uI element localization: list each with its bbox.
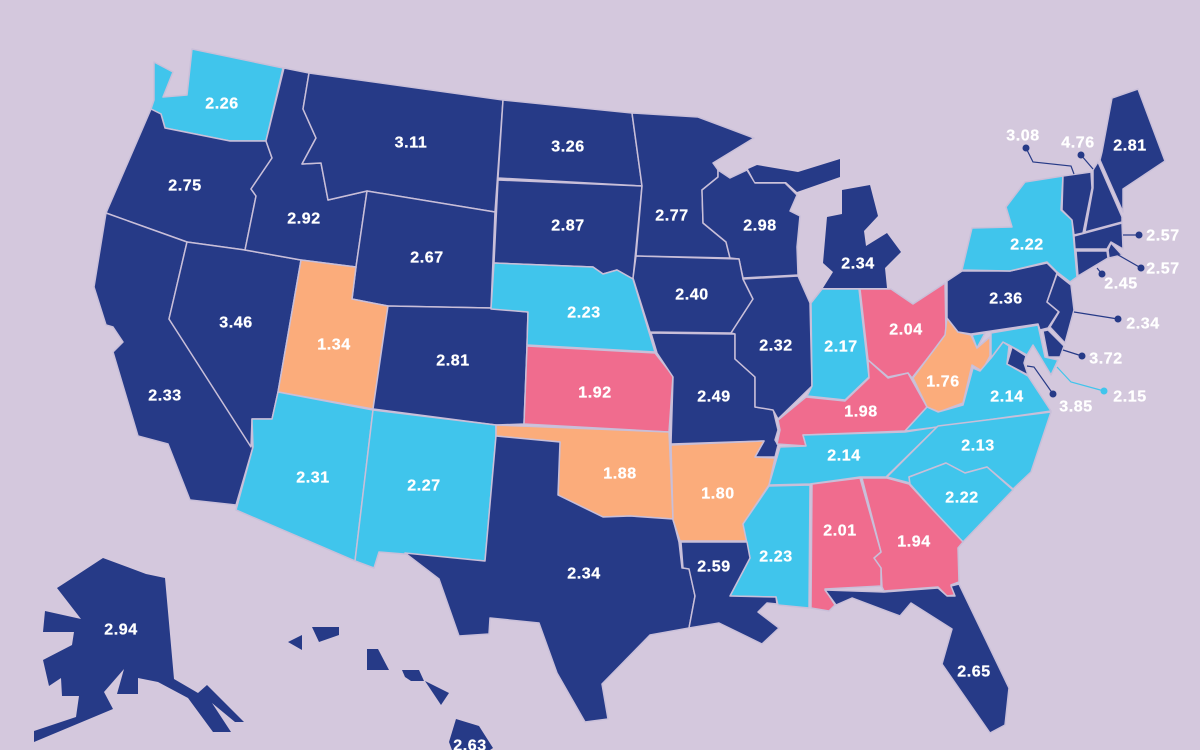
callout: Rhode Island: 2.57 bbox=[1146, 260, 1180, 278]
state: Montana: 3.11 bbox=[395, 134, 427, 152]
state: Indiana: 2.17 bbox=[824, 338, 858, 356]
state: Iowa: 2.40 bbox=[675, 286, 709, 304]
state: Nebraska bbox=[491, 263, 655, 352]
state: Oklahoma bbox=[496, 425, 673, 519]
callout: Maryland bbox=[1057, 367, 1147, 406]
state: Georgia: 1.94 bbox=[897, 534, 931, 550]
state: Wisconsin: 2.98 bbox=[743, 218, 777, 234]
state: Arkansas: 1.80 bbox=[701, 486, 735, 502]
state: Washington DC bbox=[1007, 347, 1028, 375]
state: Colorado bbox=[373, 306, 528, 425]
state: Arizona: 2.31 bbox=[296, 470, 330, 486]
callout: Washington DC bbox=[1027, 366, 1093, 416]
state: Idaho: 2.92 bbox=[287, 210, 321, 228]
state: Nebraska: 2.23 bbox=[567, 304, 601, 322]
callout: Vermont bbox=[1006, 128, 1074, 174]
state: Massachusetts bbox=[1074, 223, 1123, 249]
state: Vermont bbox=[1062, 172, 1092, 235]
callout: Delaware: 3.72 bbox=[1089, 350, 1123, 368]
state: California: 2.33 bbox=[148, 388, 182, 404]
state: Colorado: 2.81 bbox=[436, 352, 470, 370]
state: Wyoming: 2.67 bbox=[410, 250, 444, 266]
callout: Massachusetts: 2.57 bbox=[1146, 228, 1180, 244]
state: Minnesota: 2.77 bbox=[655, 208, 689, 224]
state: Louisiana bbox=[681, 542, 779, 644]
state: Nevada bbox=[169, 242, 301, 447]
state: New Hampshire bbox=[1085, 162, 1122, 232]
state: Washington bbox=[151, 49, 283, 141]
state: Oklahoma: 1.88 bbox=[603, 466, 637, 482]
state: Delaware bbox=[1043, 330, 1064, 357]
state: Georgia bbox=[862, 478, 963, 596]
state: New Jersey bbox=[1047, 274, 1074, 343]
state: Arkansas bbox=[671, 441, 775, 541]
state: Iowa bbox=[633, 256, 753, 333]
state: Idaho bbox=[245, 68, 367, 267]
state: Texas bbox=[405, 436, 695, 722]
callout: Maryland: 2.15 bbox=[1113, 388, 1147, 406]
state: Kentucky: 1.98 bbox=[844, 404, 878, 420]
state: Ohio bbox=[860, 283, 946, 378]
state: New Mexico: 2.27 bbox=[407, 478, 441, 494]
state: Washington: 2.26 bbox=[205, 96, 239, 112]
state: Nevada: 3.46 bbox=[219, 314, 253, 332]
state: Indiana bbox=[807, 289, 869, 400]
state: Arizona bbox=[236, 392, 373, 561]
callout: Delaware bbox=[1063, 350, 1123, 368]
state: Minnesota bbox=[632, 113, 754, 258]
state: North Dakota bbox=[498, 100, 642, 186]
callout: Connecticut: 2.45 bbox=[1104, 276, 1138, 292]
callout: Connecticut bbox=[1097, 268, 1138, 292]
state: Kentucky bbox=[777, 360, 927, 446]
state: Tennessee: 2.14 bbox=[827, 448, 861, 464]
state: Mississippi bbox=[730, 485, 810, 608]
callout: New Hampshire: 4.76 bbox=[1061, 134, 1095, 152]
state: Maryland panhandle bbox=[972, 333, 985, 348]
state: Florida bbox=[825, 584, 1009, 733]
state: Montana bbox=[302, 73, 503, 212]
state: Tennessee bbox=[769, 427, 937, 485]
state: Michigan: 2.34 bbox=[841, 256, 875, 272]
state: Texas: 2.34 bbox=[567, 566, 601, 582]
callout: Vermont: 3.08 bbox=[1006, 128, 1040, 144]
state: North Dakota: 3.26 bbox=[551, 138, 585, 156]
state: Alabama: 2.01 bbox=[823, 522, 857, 540]
state: California bbox=[94, 213, 253, 505]
state: Oregon bbox=[106, 109, 272, 250]
state: New York bbox=[962, 176, 1077, 282]
state: Connecticut bbox=[1076, 251, 1108, 276]
state: Florida: 2.65 bbox=[957, 664, 991, 680]
state: North Carolina: 2.13 bbox=[961, 438, 995, 454]
state: North Carolina bbox=[887, 412, 1051, 489]
callout: New Jersey: 2.34 bbox=[1126, 316, 1160, 332]
state: South Carolina: 2.22 bbox=[945, 490, 979, 506]
state: Missouri bbox=[651, 333, 778, 457]
state: Kansas bbox=[524, 346, 673, 432]
state: Alabama bbox=[811, 478, 881, 611]
state: Pennsylvania: 2.36 bbox=[989, 290, 1023, 308]
state: Michigan bbox=[823, 185, 901, 288]
callout: Washington DC: 3.85 bbox=[1059, 398, 1093, 416]
state: Kansas: 1.92 bbox=[578, 384, 612, 402]
state: Maine bbox=[1100, 89, 1165, 212]
state: Wisconsin bbox=[702, 170, 800, 278]
state: New York: 2.22 bbox=[1010, 236, 1044, 254]
state: Maryland bbox=[991, 325, 1058, 375]
state: South Dakota: 2.87 bbox=[551, 218, 585, 234]
state: New Mexico bbox=[355, 410, 496, 568]
state: West Virginia bbox=[913, 318, 990, 412]
callout: Massachusetts bbox=[1123, 228, 1180, 244]
state: West Virginia: 1.76 bbox=[926, 374, 960, 390]
state: Utah bbox=[278, 260, 388, 409]
state: South Carolina bbox=[909, 463, 1013, 542]
state: Hawaii bbox=[288, 627, 493, 750]
callout: Rhode Island bbox=[1113, 252, 1180, 278]
state: Missouri: 2.49 bbox=[697, 388, 731, 406]
state: Virginia: 2.14 bbox=[990, 388, 1024, 406]
state: Virginia bbox=[905, 342, 1051, 431]
state: Rhode Island bbox=[1108, 243, 1122, 258]
state: Maine: 2.81 bbox=[1113, 138, 1147, 154]
callout: New Hampshire bbox=[1061, 134, 1095, 169]
state: South Dakota bbox=[494, 180, 642, 279]
state: Mississippi: 2.23 bbox=[759, 548, 793, 566]
state: Utah: 1.34 bbox=[317, 336, 351, 354]
state: Louisiana: 2.59 bbox=[697, 558, 731, 576]
state: Oregon: 2.75 bbox=[168, 178, 202, 194]
state: Alaska bbox=[34, 558, 244, 742]
state: Wyoming bbox=[352, 191, 495, 308]
callout: New Jersey bbox=[1074, 312, 1160, 332]
state: Illinois: 2.32 bbox=[759, 338, 793, 354]
state: Alaska: 2.94 bbox=[104, 622, 138, 638]
state: Pennsylvania bbox=[947, 263, 1059, 334]
state: Michigan upper peninsula bbox=[748, 159, 840, 192]
state: Ohio: 2.04 bbox=[889, 322, 923, 338]
state: Illinois bbox=[731, 276, 812, 419]
